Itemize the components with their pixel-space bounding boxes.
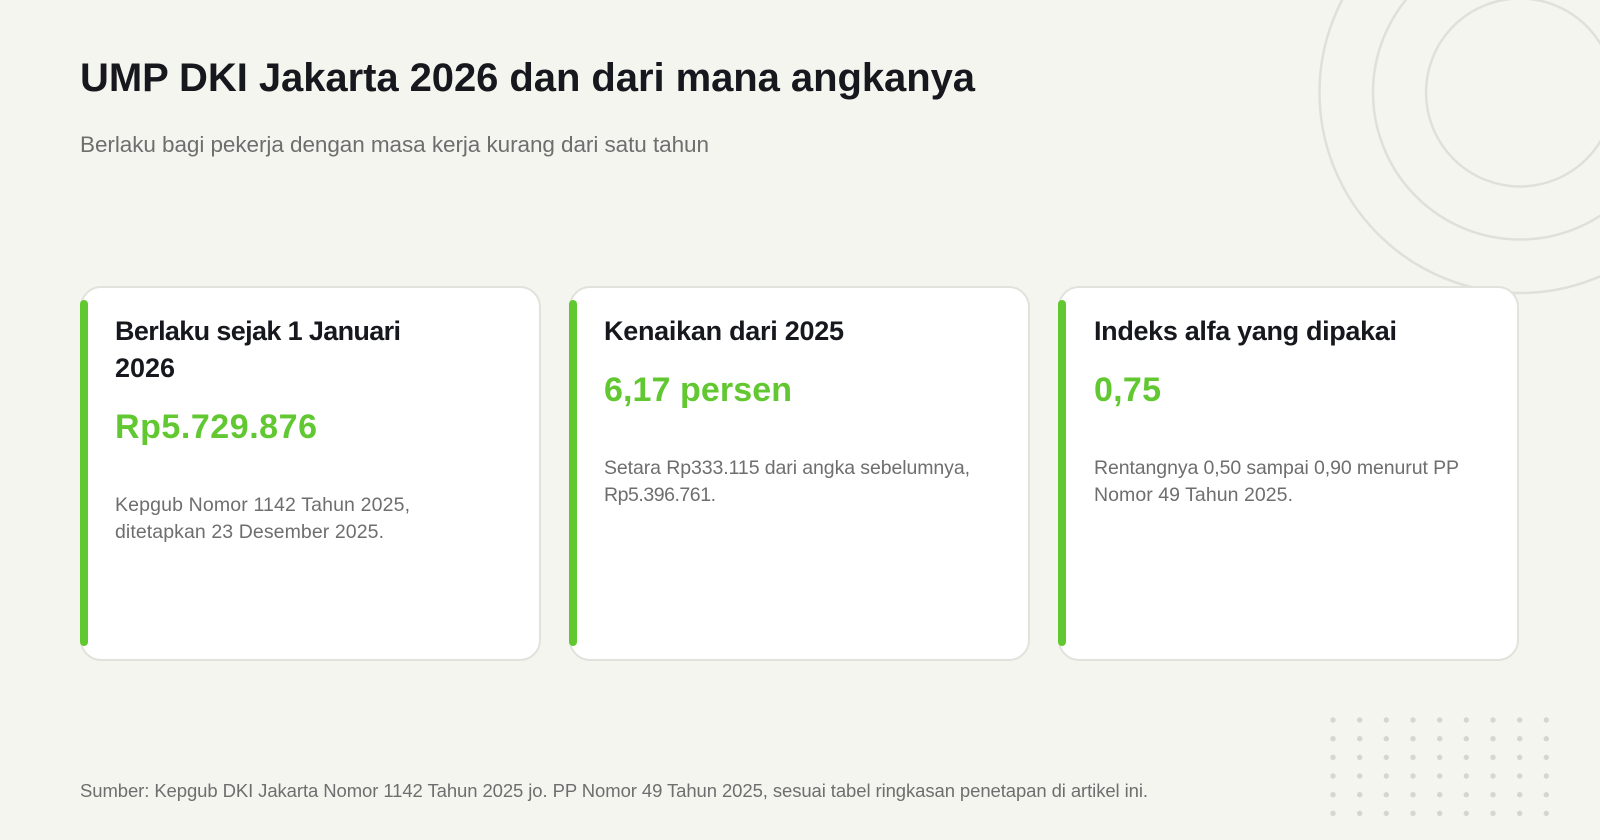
value: Rp5.729.876: Rp5.729.876	[115, 408, 317, 446]
panel: kenaikan dari 2025	[569, 287, 1029, 660]
value: 6,17 persen: 6,17 persen	[604, 371, 792, 409]
description: Rentangnya 0,50 sampai 0,90 menurut PP	[1094, 457, 1459, 479]
card background	[570, 287, 1029, 660]
description	[604, 457, 970, 506]
card heading: Indeks alfa yang dipakai	[1094, 316, 1397, 346]
panel: berlaku sejak 1 Januari 2026	[80, 287, 540, 660]
source footer: Sumber: Kepgub DKI Jakarta Nomor 1142 Tahun 2025 jo. PP Nomor 49 Tahun 2025, sesuai tabel ringkasan penetapan di artikel ini.	[80, 780, 1148, 801]
card heading	[115, 316, 401, 383]
green accent bar	[80, 300, 88, 646]
description: Kepgub Nomor 1142 Tahun 2025,	[115, 494, 410, 516]
description: ditetapkan 23 Desember 2025.	[115, 521, 384, 543]
value: 0,75: 0,75	[1094, 371, 1161, 409]
description: Rp5.396.761.	[604, 484, 716, 506]
card background	[81, 287, 540, 660]
description	[1094, 457, 1459, 506]
panel: indeks alfa yang dipakai	[1058, 287, 1518, 660]
card heading: Berlaku sejak 1 Januari	[115, 316, 401, 346]
description: Setara Rp333.115 dari angka sebelumnya,	[604, 457, 970, 479]
description: Nomor 49 Tahun 2025.	[1094, 484, 1293, 506]
decorative concentric circles	[1320, 0, 1600, 293]
title: UMP DKI Jakarta 2026 dan dari mana angkanya	[80, 56, 976, 100]
card heading: 2026	[115, 353, 175, 383]
card background	[1059, 287, 1518, 660]
decorative dot grid	[1330, 717, 1549, 816]
green accent bar	[569, 300, 577, 646]
subtitle: Berlaku bagi pekerja dengan masa kerja kurang dari satu tahun	[80, 132, 709, 157]
card heading: Kenaikan dari 2025	[604, 316, 844, 346]
green accent bar	[1058, 300, 1066, 646]
description	[115, 494, 410, 543]
